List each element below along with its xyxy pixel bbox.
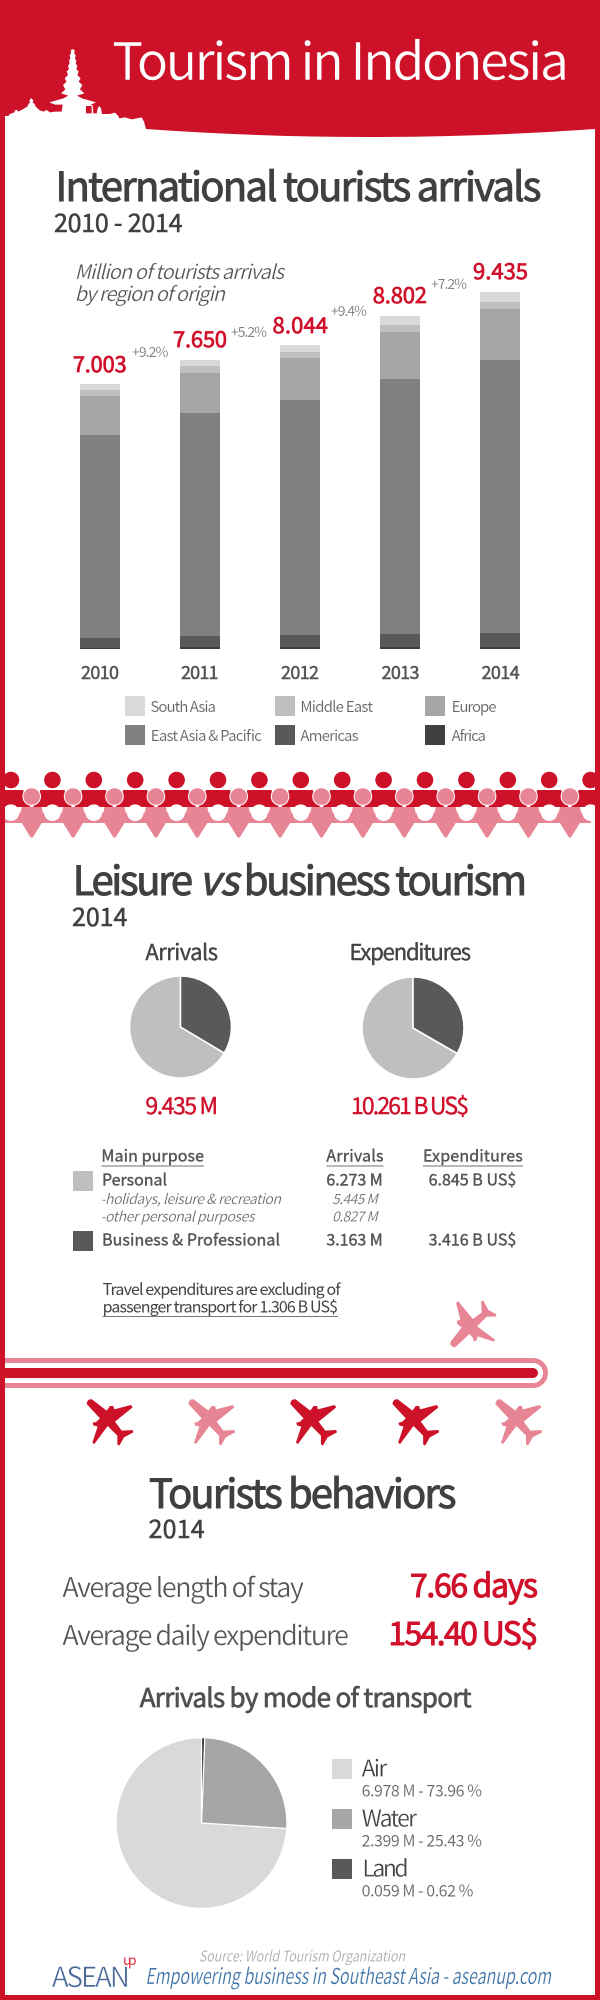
legend: air [332,1750,482,1802]
subheading: year: 2014 [72,898,128,934]
heading: Leisure [73,849,193,907]
logo: ASEAN up: up [123,1950,137,1970]
legend: land: 0.059 M - 0.62 % [362,1878,474,1902]
subheading: period: 2010 - 2014 [54,204,183,240]
row: business: Business & Professional [102,1227,280,1251]
legend: land: Land [362,1850,409,1884]
row: personal: Personal [102,1167,167,1191]
row: personal [73,1167,516,1191]
stat: length of stay: Average length of stay [62,1566,304,1605]
row: personal breakdown: 5.445 M [332,1189,379,1209]
table header: Main purpose [101,1143,204,1167]
heading [73,849,527,907]
row: personal: 6.845 B US$ [429,1167,516,1191]
chart caption [75,256,286,307]
legend: regions [125,696,497,746]
chart heading: Arrivals by mode of transport [140,1678,472,1715]
table header: Expenditures [423,1143,523,1167]
table: main purpose [73,1143,523,1251]
stacked bar chart [80,292,520,649]
growth rates: +9.4% [331,301,367,321]
growth rates [132,274,467,362]
growth rates: +9.2% [132,342,168,362]
stat: daily expenditure [62,1609,538,1655]
year axis labels: 2014 [482,659,520,685]
table header [101,1143,523,1167]
footer [52,1946,552,1996]
row: personal breakdown [101,1189,379,1227]
bar 2012 [280,345,320,649]
growth rates: +5.2% [231,322,267,342]
total: arrivals: 9.435 M [145,1087,218,1121]
legend: air: 6.978 M - 73.96 % [362,1778,482,1802]
legend: regions: Africa [452,725,486,746]
legend: regions: East Asia & Pacific [151,725,262,746]
stat: daily expenditure: Average daily expenditure [62,1614,349,1653]
bar 2014 [480,292,520,649]
heading: International tourists arrivals [56,155,542,213]
chart caption: by region of origin [75,278,226,307]
row: business [73,1227,516,1251]
legend: regions: Americas [300,725,359,746]
footnote: passenger transport for 1.306 B US$ [103,1294,338,1318]
totals: 7.003 [73,347,127,379]
icon row: planes [87,1399,542,1446]
row: business: 3.416 B US$ [429,1227,516,1251]
footnote [103,1276,341,1318]
stat: length of stay [62,1561,538,1607]
stat: length of stay: 7.66 days [410,1561,538,1607]
title: Tourism in Indonesia [112,20,569,95]
legend: regions: Middle East [300,696,373,717]
logo: ASEAN up: ASEAN [52,1956,130,1996]
heading: vs [199,849,242,907]
section: international tourists arrivals [54,155,542,746]
icon: temple silhouette [5,49,146,130]
legend: water: 2.399 M - 25.43 % [362,1828,482,1852]
row: personal: 6.273 M [326,1167,383,1191]
legend: land [332,1850,474,1902]
totals: 9.435 [473,254,528,286]
totals: 7.650 [173,322,227,354]
total: expenditures: 10.261 B US$ [351,1087,469,1121]
year axis labels: 2013 [382,659,420,685]
icon: taking-off plane [450,1301,497,1347]
subheading: year: 2014 [148,1510,205,1546]
growth rates: +7.2% [431,274,467,294]
legend: air: Air [362,1750,387,1784]
footnote: Travel expenditures are excluding of [103,1276,341,1300]
legend: regions: South Asia [150,696,216,717]
year axis labels [81,659,520,685]
legend: water: Water [362,1800,417,1834]
row: personal breakdown: -holidays, leisure & recreation [101,1189,282,1209]
year axis labels: 2012 [281,659,319,685]
pie title: expenditures: Expenditures [349,935,471,967]
header [5,20,569,130]
pie chart: expenditures [362,977,464,1079]
year axis labels: 2011 [181,659,218,685]
pie title: arrivals: Arrivals [145,935,218,967]
heading: business tourism [244,849,527,907]
table header: Arrivals [326,1143,384,1167]
legend: regions: Europe [452,696,497,717]
section: tourists behaviors [62,1462,538,1908]
pie chart: transport [116,1738,287,1908]
pie chart: arrivals [129,976,231,1078]
stat: daily expenditure: 154.40 US$ [388,1609,538,1655]
row: personal breakdown: -other personal purposes [101,1207,256,1227]
totals [73,254,528,379]
totals: 8.044 [272,308,328,340]
section: leisure vs business [72,849,527,1318]
heading: Tourists behaviors [149,1462,456,1520]
totals: 8.802 [373,278,427,310]
icon row: people holding hands [0,772,600,838]
year axis labels: 2010 [81,659,119,685]
row: business: 3.163 M [326,1227,383,1251]
legend: water [332,1800,482,1852]
bar 2011 [180,360,220,649]
source: Source: World Tourism Organization [199,1946,406,1967]
bar 2010 [80,384,120,649]
chart caption: Million of tourists arrivals [75,256,286,285]
bar 2013 [380,316,420,649]
row: personal breakdown: 0.827 M [332,1207,379,1227]
runway track [0,1360,546,1386]
